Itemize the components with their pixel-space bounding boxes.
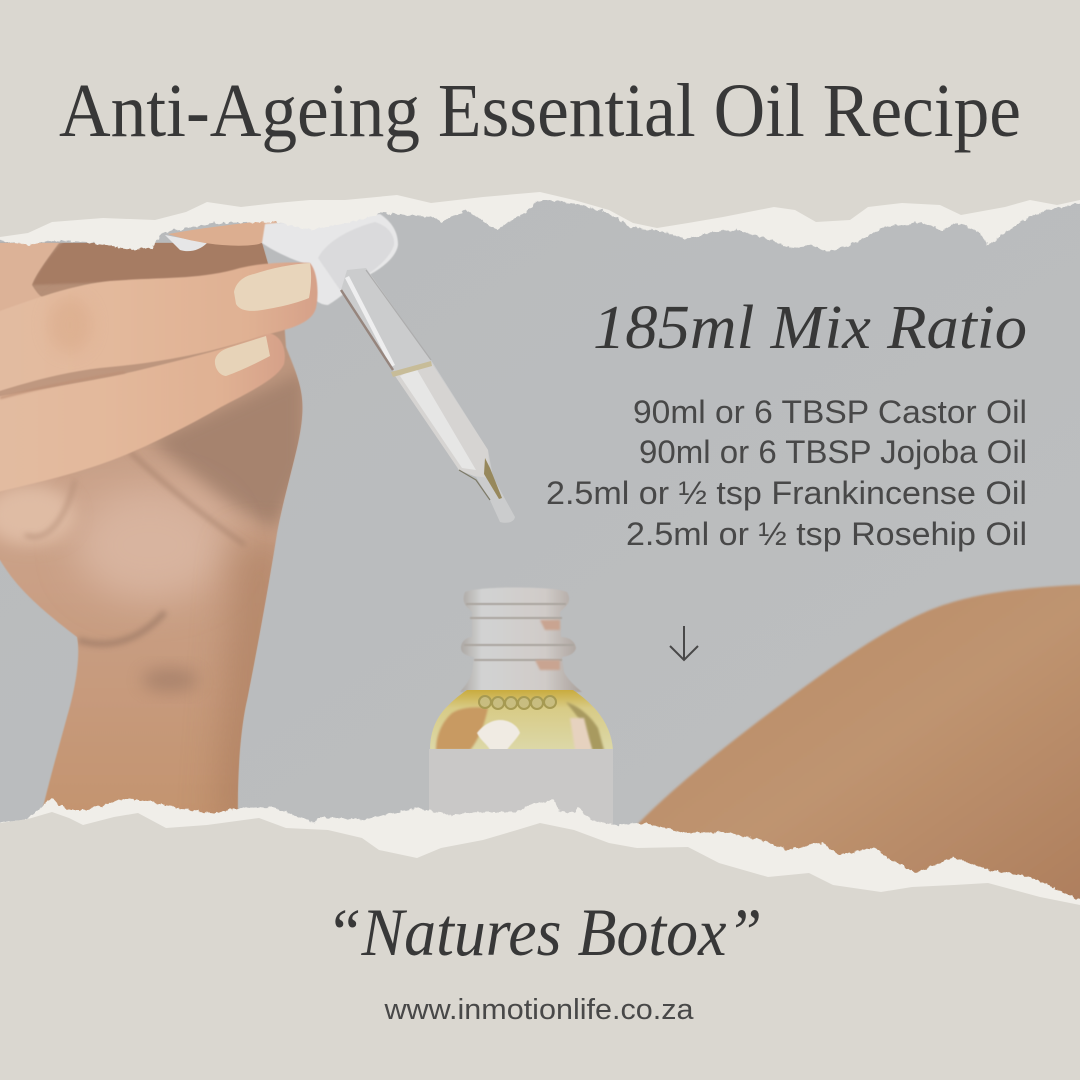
- finger gap shadow: [0, 372, 125, 398]
- knuckle shading: [48, 297, 92, 353]
- orange reflection in oil: [436, 707, 488, 750]
- panel: top torn paper: [0, 0, 1080, 252]
- bottle oil: [430, 690, 613, 750]
- middle fingernail: [215, 336, 270, 376]
- panel: bottom torn paper: [0, 798, 1080, 1080]
- quote: “Natures Botox”: [326, 894, 762, 970]
- palm shading: [0, 235, 305, 830]
- dropper tip oil: [484, 458, 502, 499]
- brown edge reflection: [341, 290, 393, 370]
- text block: ingredient list: 90ml or 6 TBSP Castor Oil: [633, 394, 1027, 430]
- palm and wrist: [0, 243, 302, 820]
- bottle label: [429, 749, 613, 834]
- torn white edge: [0, 798, 1080, 1000]
- tube oil line: [391, 361, 432, 377]
- index fingernail: [234, 263, 311, 311]
- website url: www.inmotionlife.co.za: [383, 994, 694, 1026]
- text block: ingredient list: [546, 394, 1027, 552]
- dropper cap: [262, 214, 398, 305]
- middle finger: [0, 333, 285, 498]
- neck reflections: [535, 620, 560, 670]
- bottle neck: [460, 588, 582, 692]
- glass tube: [341, 268, 515, 523]
- neck ring lines: [464, 604, 574, 660]
- air bubbles: [479, 696, 556, 709]
- white reflections: [477, 720, 520, 750]
- thumb: [168, 220, 277, 246]
- index finger: [0, 263, 318, 400]
- bottle: [429, 588, 613, 834]
- rod inside the tube: [345, 276, 395, 367]
- dark reflection right: [566, 702, 604, 750]
- tube contents: [393, 362, 490, 478]
- arrow: down: [670, 626, 698, 660]
- subheading: 185ml Mix Ratio: [593, 294, 1027, 362]
- white cap behind thumb: [165, 235, 207, 251]
- torn white edge: [0, 0, 1080, 252]
- dropper: [262, 214, 515, 523]
- photo: hand: [0, 220, 305, 830]
- photo background: [0, 190, 1080, 910]
- text block: ingredient list: 2.5ml or ½ tsp Rosehip Oil: [626, 516, 1027, 552]
- text block: ingredient list: 2.5ml or ½ tsp Frankincense Oil: [546, 475, 1027, 511]
- title: Anti-Ageing Essential Oil Recipe: [59, 69, 1021, 153]
- photo: blurred shoulder: [630, 584, 1080, 920]
- text block: ingredient list: 90ml or 6 TBSP Jojoba Oil: [639, 434, 1027, 470]
- paper sheet: [0, 812, 1080, 1080]
- paper sheet: [0, 0, 1080, 237]
- dropper cap inner ring: [318, 222, 394, 290]
